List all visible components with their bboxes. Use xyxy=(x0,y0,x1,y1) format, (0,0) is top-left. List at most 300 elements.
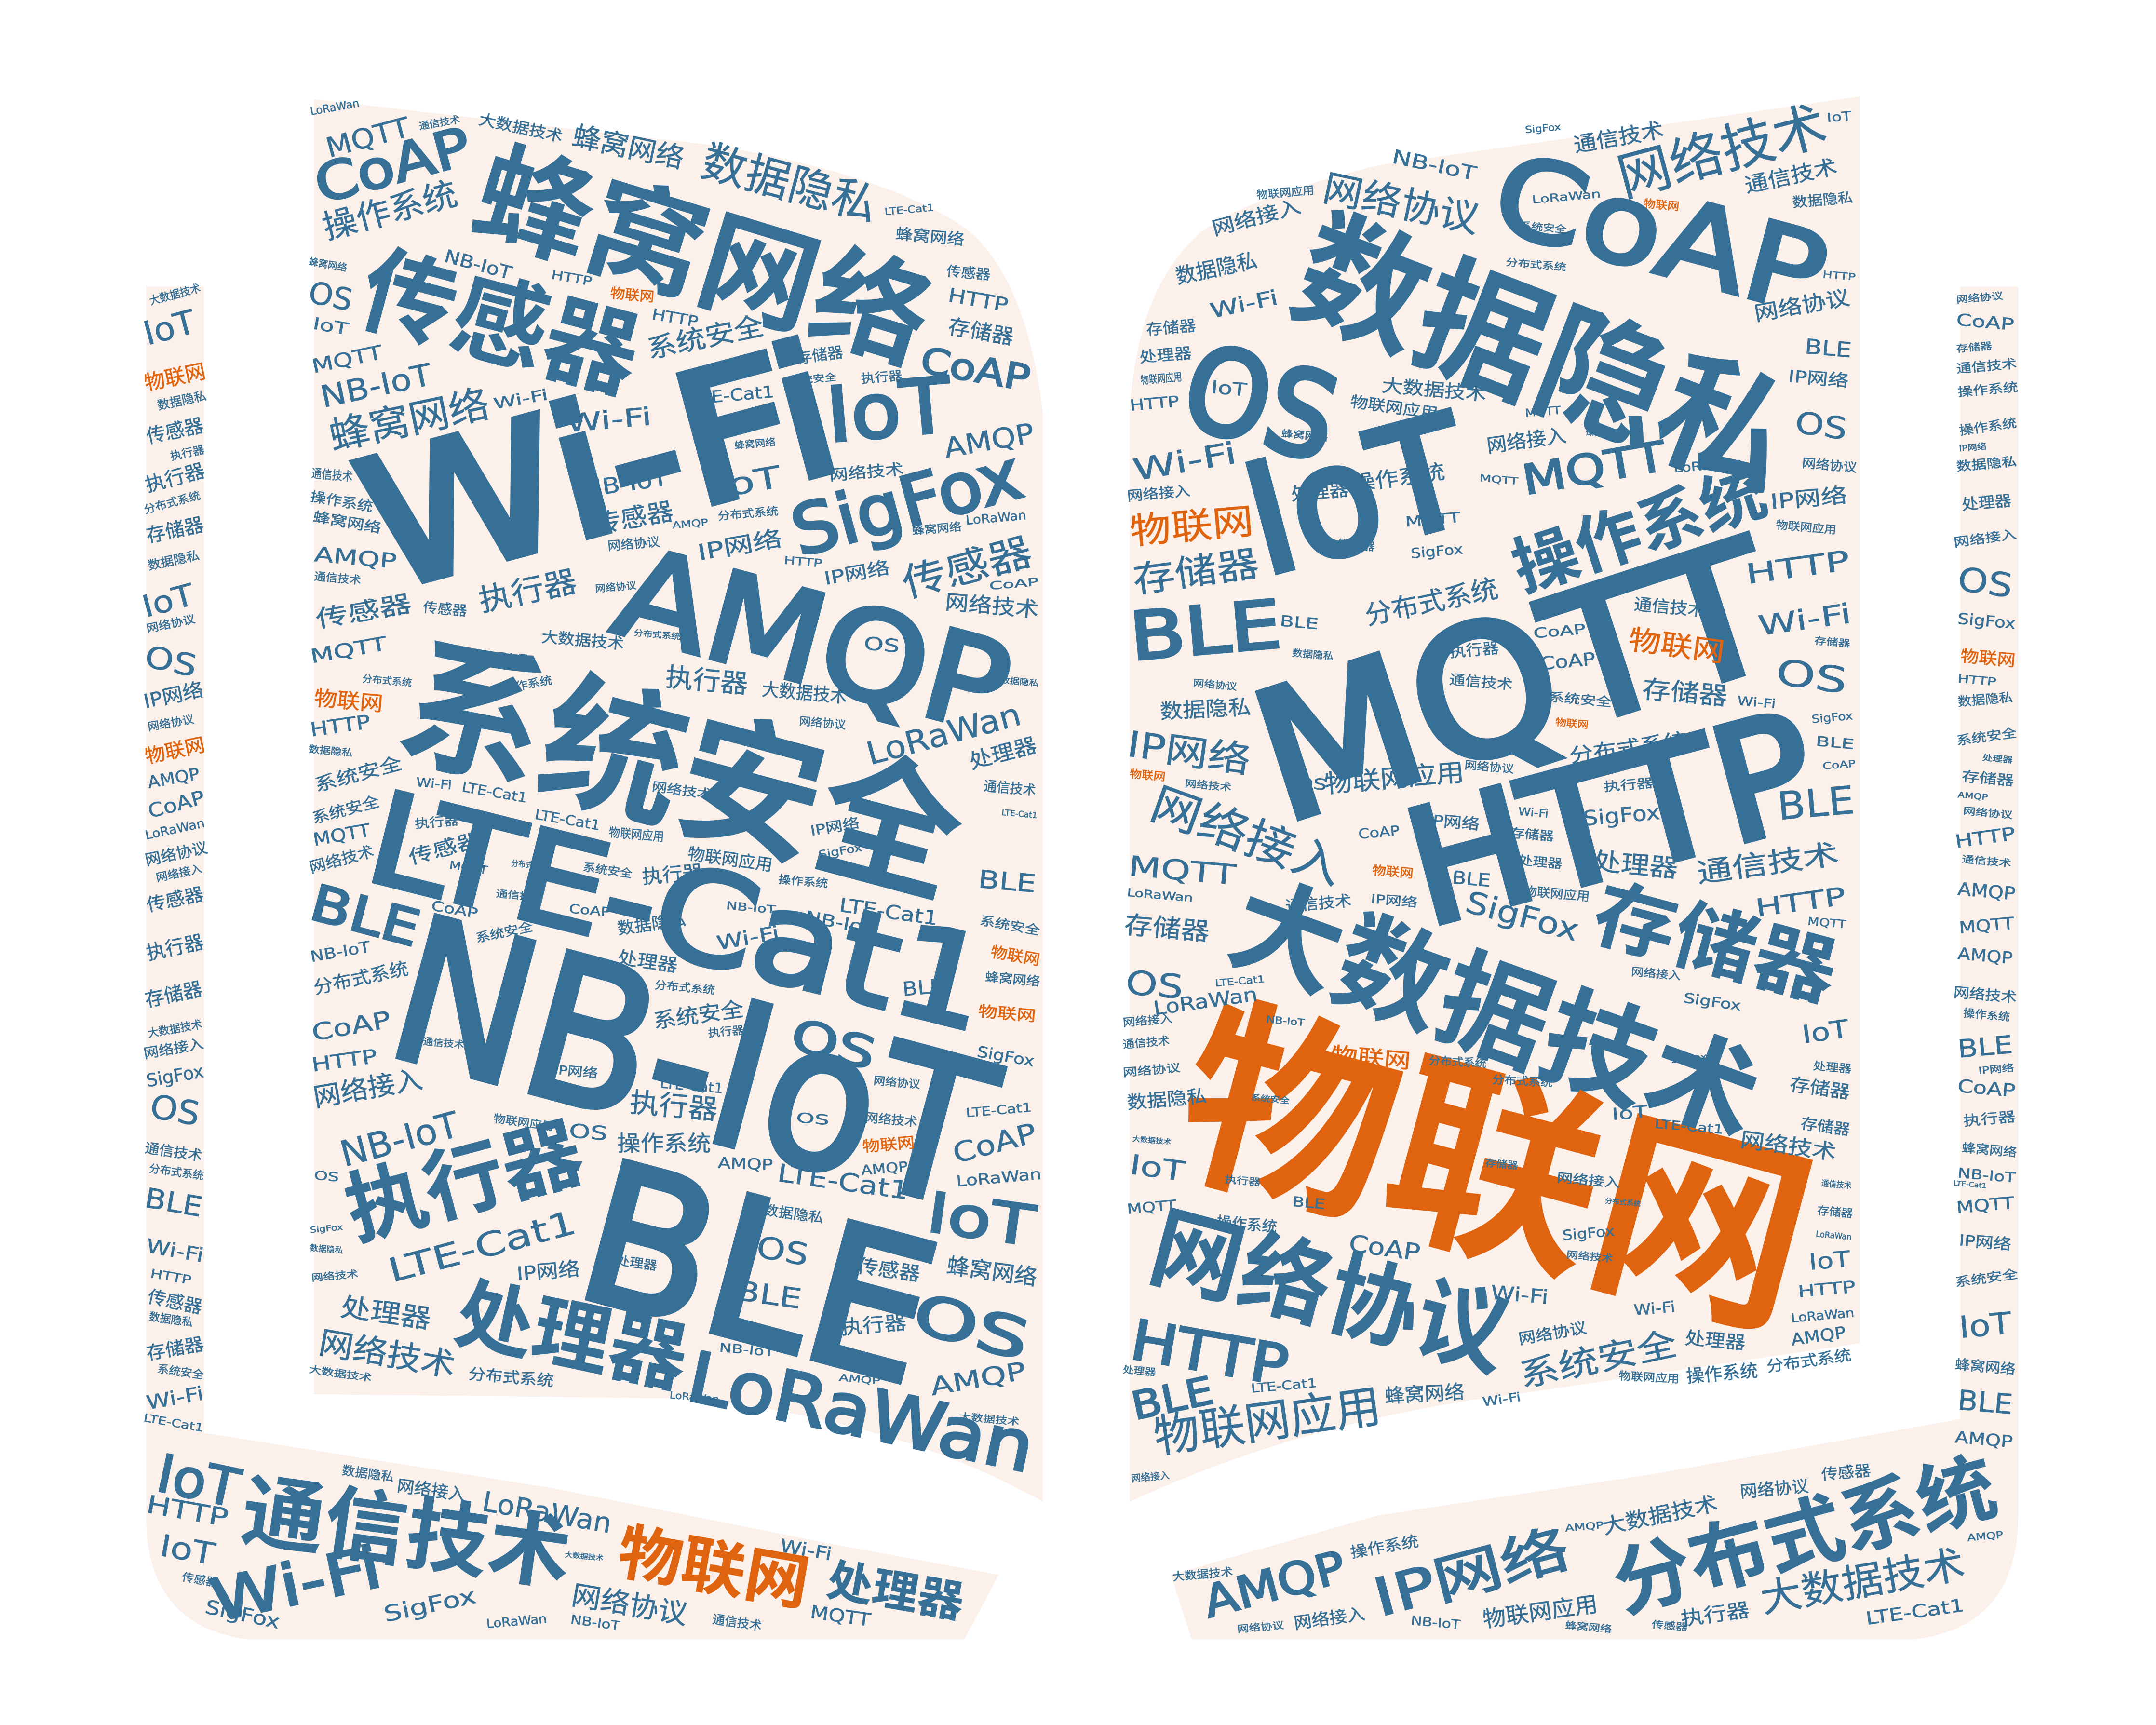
panel: right page small words: 执行器 xyxy=(1224,1173,1261,1188)
panel: right page small words: IoT xyxy=(1800,1014,1851,1050)
panel: left page small words: 操作系统 xyxy=(502,674,553,695)
panel: left page small words: LTE-Cat1 xyxy=(660,1075,724,1097)
panel: left strip words: IoT xyxy=(138,577,198,624)
panel: left page small words: AMQP xyxy=(717,1155,773,1174)
panel: left page small words: 系统安全 xyxy=(310,793,381,827)
panel: right page small words: 网络技术 xyxy=(1185,778,1232,793)
panel: right page small words: 分布式系统 xyxy=(1604,1197,1641,1208)
panel: right page small words: 存储器 xyxy=(1484,1157,1519,1172)
panel: left page small words: 大数据技术 xyxy=(477,111,565,146)
panel: right page large words: 操作系统 xyxy=(1504,455,1775,606)
panel: right strip words: 通信技术 xyxy=(1961,853,2012,869)
panel: right strip words xyxy=(1953,290,2019,1452)
panel: left strip words: 传感器 xyxy=(145,884,205,916)
panel: left page small words: 网络技术 xyxy=(864,1111,918,1130)
panel: left page large words: BLE xyxy=(559,1121,957,1428)
panel: right page small words: 物联网应用 xyxy=(1140,371,1183,387)
panel: right page small words: 系统安全 xyxy=(1516,1324,1680,1395)
panel: left page small words: 系统安全 xyxy=(789,371,836,387)
panel: left page small words: LTE-Cat1 xyxy=(884,202,934,217)
panel: right page small words: Wi-Fi xyxy=(1737,694,1776,712)
panel: left page small words: CoAP xyxy=(568,902,611,920)
panel: right page small words: IP网络 xyxy=(1427,811,1480,834)
panel: bottom right band words: 大数据技术 xyxy=(1172,1566,1233,1584)
panel: left page small words: NB-IoT xyxy=(581,465,670,502)
panel: left page small words: MQTT xyxy=(323,111,414,164)
panel: right page small words: Wi-Fi xyxy=(1490,1281,1550,1308)
panel: left page small words: Wi-Fi xyxy=(416,775,452,793)
panel: right page small words: 网络接入 xyxy=(1144,777,1350,895)
panel: left page small words: 网络接入 xyxy=(311,1064,425,1113)
panel: left strip words: 网络接入 xyxy=(155,862,203,885)
panel: right page small words: 蜂窝网络 xyxy=(1384,1381,1465,1407)
panel: left page small words: OS xyxy=(754,1229,811,1273)
panel: right page small words: 物联网 xyxy=(1555,716,1589,730)
panel: left page small words: MQTT xyxy=(309,633,389,668)
panel: right strip words: IP网络 xyxy=(1959,442,1987,454)
panel: left page small words: Wi-Fi xyxy=(492,386,550,413)
panel: right page small words: OS xyxy=(1295,774,1327,794)
panel: left page small words: BLE xyxy=(902,975,944,1001)
panel: left page small words: 蜂窝网络 xyxy=(984,970,1041,989)
panel: right page small words: 通信技术 xyxy=(1122,1035,1170,1051)
panel: left page small words: 蜂窝网络 xyxy=(570,120,687,175)
panel: left page large words: 蜂窝网络 xyxy=(459,126,946,389)
panel: right strip words: 网络协议 xyxy=(1963,805,2013,821)
panel: right page small words: 物联网应用 xyxy=(1323,758,1466,799)
panel: left page small words: 大数据技术 xyxy=(761,679,848,707)
panel: left page small words: 网络技术 xyxy=(944,590,1039,622)
panel: right page small words: 分布式系统 xyxy=(1362,573,1500,631)
panel: left strip words: 网络协议 xyxy=(144,839,209,869)
panel: left page small words: HTTP xyxy=(946,284,1010,317)
panel: bottom right band words: 网络协议 xyxy=(1739,1477,1809,1502)
panel: right strip words: BLE xyxy=(1956,1384,2014,1421)
panel: left page small words: 物联网 xyxy=(989,943,1041,969)
panel: right page small words: HTTP xyxy=(1744,545,1852,591)
panel: right page small words: 操作系统 xyxy=(1350,459,1446,497)
panel: left page small words: IoT xyxy=(713,459,784,505)
panel: right page small words: 处理器 xyxy=(1122,1363,1156,1378)
panel: bottom right band words: NB-IoT xyxy=(1410,1614,1461,1632)
panel: right page large words: HTTP xyxy=(1388,677,1835,962)
panel: right page small words: 分布式系统 xyxy=(1505,256,1567,273)
panel: right page small words: 处理器 xyxy=(1518,853,1563,872)
panel: right strip words: SigFox xyxy=(1957,610,2016,633)
panel: right page small words: CoAP xyxy=(1358,822,1401,842)
panel: left page small words: 网络技术 xyxy=(308,843,376,876)
panel: left page small words: 网络协议 xyxy=(595,579,637,594)
panel: right page small words: 网络接入 xyxy=(1210,195,1303,240)
panel: left page small words: NB-IoT xyxy=(336,1104,464,1175)
panel: left page small words: LoRaWan xyxy=(956,1166,1042,1190)
panel: right strip words: 操作系统 xyxy=(1958,416,2018,438)
panel: right page small words: SigFox xyxy=(1462,884,1583,948)
panel: left strip words: 存储器 xyxy=(145,1334,205,1364)
panel: left page small words: 执行器 xyxy=(664,662,749,700)
panel: left page small words: 通信技术 xyxy=(422,1036,465,1051)
panel: left strip words: 数据隐私 xyxy=(148,1310,193,1329)
panel: left page small words: HTTP xyxy=(310,1045,378,1077)
panel: bottom left band words: IoT xyxy=(151,1442,245,1520)
panel: left page large words: NB-IoT xyxy=(369,873,1017,1255)
panel: right page small words: 执行器 xyxy=(1603,776,1654,795)
panel: right page small words: 分布式系统 xyxy=(1492,1074,1553,1090)
panel: right page small words: 数据隐私 xyxy=(1159,695,1252,724)
panel: left strip words: 大数据技术 xyxy=(148,282,202,308)
panel: left page small words: NB-IoT xyxy=(726,900,777,916)
panel: right page small words: 分布式系统 xyxy=(1765,1347,1852,1376)
panel: bottom right band words: LTE-Cat1 xyxy=(1864,1595,1966,1629)
panel: right strip words: BLE xyxy=(1956,1030,2014,1064)
panel: left page small words: 网络技术 xyxy=(316,1324,458,1384)
panel: left page small words: 数据隐私 xyxy=(616,910,687,939)
panel: right page small words: 物联网 xyxy=(1643,198,1680,213)
panel: left page small words: OS xyxy=(906,1280,1036,1373)
panel: right page small words: IP网络 xyxy=(1788,367,1849,391)
panel: left page small words: LoRaWan xyxy=(862,696,1025,772)
panel: right page small words: MQTT xyxy=(1524,404,1562,420)
panel: left page small words: IP网络 xyxy=(822,557,891,589)
panel: right page small words: 物联网应用 xyxy=(1775,519,1837,537)
panel: right page small words: 存储器 xyxy=(1123,911,1211,947)
panel: right page large words: 存储器 xyxy=(1584,869,1846,1019)
panel: right page small words: MQTT xyxy=(1519,432,1670,505)
panel: bottom right band words: 分布式系统 xyxy=(1604,1443,2006,1630)
panel: right page small words: LTE-Cat1 xyxy=(1214,973,1265,989)
panel: left page small words: OS xyxy=(305,274,356,318)
panel: right strip words: IP网络 xyxy=(1958,1232,2012,1253)
panel: left page small words: 蜂窝网络 xyxy=(308,256,348,274)
panel: left page small words: 物联网应用 xyxy=(493,1112,554,1133)
panel: right page small words: 网络接入 xyxy=(1630,966,1681,983)
panel: right strip words: AMQP xyxy=(1957,878,2016,904)
panel: left page small words: 系统安全 xyxy=(979,914,1041,938)
panel: right page small words: BLE xyxy=(1775,778,1856,829)
panel: right page small words: 网络协议 xyxy=(1752,286,1851,326)
panel: left page small words: MQTT xyxy=(310,341,385,378)
panel: left page small words: 大数据技术 xyxy=(541,629,625,653)
panel: right page small words: SigFox xyxy=(1671,1051,1708,1065)
panel: left page small words: 蜂窝网络 xyxy=(312,508,382,536)
panel: right strip words: IP网络 xyxy=(1978,1062,2015,1077)
panel: left page small words: 物联网 xyxy=(862,1134,916,1156)
panel: right strip words: 操作系统 xyxy=(1957,380,2019,400)
panel: right page small words: 存储器 xyxy=(1817,1205,1853,1220)
panel: right page small words: HTTP xyxy=(1822,269,1856,283)
panel: right page small words: 物联网 xyxy=(1372,863,1414,881)
panel: left page small words: NB-IoT xyxy=(719,1341,775,1360)
panel: right strip words: AMQP xyxy=(1957,944,2013,968)
panel: left page small words: 网络技术 xyxy=(311,1268,359,1283)
panel: left page large words xyxy=(308,115,1041,1488)
panel: left page small words: 处理器 xyxy=(338,1292,433,1334)
panel: right page small words: LoRaWan xyxy=(1791,1306,1855,1326)
panel: bottom left band words: SigFox xyxy=(203,1596,282,1633)
panel: right page small words: BLE xyxy=(1292,1193,1326,1213)
panel: right page small words: 网络接入 xyxy=(1556,1171,1620,1191)
panel: left page small words: 网络协议 xyxy=(873,1075,921,1091)
panel: left strip words: 大数据技术 xyxy=(147,1018,203,1040)
panel: right page small words: Wi-Fi xyxy=(1633,1298,1676,1319)
panel: right page small words: SigFox xyxy=(1562,1223,1615,1243)
panel: right page small words: 系统安全 xyxy=(1548,690,1613,710)
panel: right page large words: OS xyxy=(1170,319,1351,489)
panel: left page small words: 存储器 xyxy=(795,344,844,367)
panel: left page small words: CoAP xyxy=(989,576,1039,593)
panel: right strip words: AMQP xyxy=(1954,1428,2013,1452)
panel: right page small words: IoT xyxy=(1128,1149,1187,1188)
panel: right page small words: 物联网应用 xyxy=(1150,1380,1384,1464)
panel: right page small words: 分布式系统 xyxy=(1428,1054,1487,1070)
panel: bottom left band words: 网络接入 xyxy=(396,1476,467,1505)
panel: right page small words: 处理器 xyxy=(1812,1060,1852,1076)
panel: left strip words: 分布式系统 xyxy=(143,489,202,516)
panel: right page small words: 物联网 xyxy=(1128,500,1255,553)
panel: left page small words: 网络技术 xyxy=(651,780,713,802)
panel: left strip words: HTTP xyxy=(149,1267,192,1288)
panel: left page small words: LTE-Cat1 xyxy=(776,1159,911,1206)
panel: right page small words: 网络接入 xyxy=(1485,424,1567,458)
panel: left page small words: BLE xyxy=(977,865,1037,899)
panel: right page large words: IoT xyxy=(1227,382,1488,610)
panel: right page small words: 网络协议 xyxy=(1319,166,1483,242)
panel: right page small words: 网络接入 xyxy=(1131,1469,1170,1484)
panel: bottom right band words: 执行器 xyxy=(1680,1599,1751,1631)
panel: left strip words: IoT xyxy=(139,302,200,353)
panel: left page small words: OS xyxy=(795,1109,830,1128)
panel: right page small words: CoAP xyxy=(1822,757,1856,772)
panel: left page small words: HTTP xyxy=(550,268,593,289)
panel: left page small words: CoAP xyxy=(917,339,1033,400)
panel: left strip words: OS xyxy=(142,639,200,684)
panel: left page small words: LTE-Cat1 xyxy=(534,806,602,834)
panel: left page small words: MQTT xyxy=(311,820,372,850)
panel: left page large words: AMQP xyxy=(601,519,1024,762)
panel: bottom left band words: 网络协议 xyxy=(569,1579,690,1631)
panel: left page small words: OS xyxy=(785,1009,881,1080)
panel: left strip words: 存储器 xyxy=(144,513,205,547)
panel: left strip words: SigFox xyxy=(145,1061,205,1092)
panel: left page small words: 通信技术 xyxy=(311,466,353,485)
panel: right page large words: 大数据技术 xyxy=(1214,858,1776,1167)
panel: right page small words: 传感器 xyxy=(1336,538,1375,553)
panel: left page large words: LTE-Cat1 xyxy=(354,764,1004,1060)
panel: left page large words: LoRaWan xyxy=(681,1336,1041,1488)
panel: right page large words: MQTT xyxy=(1231,500,1802,863)
panel: right page small words: OS xyxy=(1773,651,1850,702)
panel: right page small words: 通信技术 xyxy=(1743,155,1839,198)
panel: bottom right band words xyxy=(1172,1443,2006,1635)
panel: right page small words: 数据隐私 xyxy=(1126,1086,1208,1113)
panel: right page large words: 物联网 xyxy=(1154,972,1835,1370)
panel: left page small words: 分布式系统 xyxy=(511,859,547,872)
panel: right page small words: 网络接入 xyxy=(1126,483,1191,504)
panel: left page large words: 执行器 xyxy=(336,1107,593,1257)
panel: right page small words: 存储器 xyxy=(1800,1115,1851,1139)
panel: right page small words: 操作系统 xyxy=(1585,426,1619,440)
panel: left page small words: 操作系统 xyxy=(617,1131,711,1156)
panel: left page small words: 数据隐私 xyxy=(696,135,883,231)
panel: left strip words: 物联网 xyxy=(143,734,207,768)
panel: left page small words: CoAP xyxy=(430,897,479,921)
panel: left page small words: 蜂窝网络 xyxy=(895,226,965,249)
panel: left page small words: OS xyxy=(313,1168,339,1185)
panel: left page small words: 执行器 xyxy=(839,1311,907,1339)
panel: right page small words: LoRaWan xyxy=(1532,188,1601,206)
panel: bottom left band words: IoT xyxy=(157,1528,218,1572)
panel: left strip words: 执行器 xyxy=(144,931,205,965)
panel: bottom left band words: 数据隐私 xyxy=(341,1463,395,1485)
panel: right page small words: Wi-Fi xyxy=(1482,1390,1522,1410)
panel: right page small words: 蜂窝网络 xyxy=(1281,428,1328,443)
panel: left page small words: MQTT xyxy=(448,859,489,877)
panel: left page small words: 操作系统 xyxy=(778,874,828,890)
panel: right strip words: 通信技术 xyxy=(1956,357,2017,377)
panel: left page small words: 数据隐私 xyxy=(1000,675,1039,688)
panel: left page small words: HTTP xyxy=(783,554,823,570)
panel: right strip words: 蜂窝网络 xyxy=(1954,1356,2016,1377)
panel: left page small words: 系统安全 xyxy=(474,920,534,946)
panel: right page small words: 系统安全 xyxy=(1519,220,1567,235)
panel: left strip words: 网络协议 xyxy=(145,613,196,635)
panel: left page small words: 物联网 xyxy=(610,285,655,305)
panel: right page small words: Wi-Fi xyxy=(1518,805,1549,821)
panel: left strip words: LTE-Cat1 xyxy=(143,1412,204,1435)
panel: left strip words: 传感器 xyxy=(144,415,205,448)
panel: left page small words: 大数据技术 xyxy=(958,1411,1020,1428)
panel: right strip words: NB-IoT xyxy=(1957,1164,2016,1186)
panel: right strip words: 系统安全 xyxy=(1955,726,2018,749)
panel: left strip words: CoAP xyxy=(146,786,207,823)
panel: left page small words: 系统安全 xyxy=(644,310,767,365)
panel: bottom right band words: 传感器 xyxy=(1820,1462,1872,1483)
panel: right page small words: 物联网应用 xyxy=(1349,393,1439,423)
panel: right page small words: 通信技术 xyxy=(1449,671,1513,693)
panel: bottom left band words: 通信技术 xyxy=(236,1464,577,1603)
panel: left strip words: 物联网 xyxy=(142,359,208,396)
panel: right strip words: 处理器 xyxy=(1961,492,2012,514)
panel: left page small words: AMQP xyxy=(861,1158,908,1179)
panel: left strip words: LoRaWan xyxy=(144,816,206,843)
panel: right page small words: 通信技术 xyxy=(1694,838,1841,889)
panel: right page small words: 物联网 xyxy=(1129,768,1166,783)
panel: bottom left band words: 物联网 xyxy=(612,1516,815,1619)
panel: left page small words: NB-IoT xyxy=(442,246,514,283)
panel: right strip words: 数据隐私 xyxy=(1957,690,2013,710)
panel: right page small words: MQTT xyxy=(1127,850,1238,891)
panel: left page large words: 系统安全 xyxy=(384,616,980,927)
panel: left page small words: 分布式系统 xyxy=(717,505,779,523)
panel: left page small words: LTE-Cat1 xyxy=(384,1203,580,1291)
panel: right page small words: IP网络 xyxy=(1370,892,1418,910)
panel: left page small words: 蜂窝网络 xyxy=(325,381,493,459)
panel: right page small words: SigFox xyxy=(1683,989,1742,1014)
panel: right page small words: 网络协议 xyxy=(1464,759,1514,776)
panel: left page small words: IoT xyxy=(923,1180,1039,1259)
panel: right page small words: 网络技术 xyxy=(1566,1249,1614,1264)
panel: right page small words: 大数据技术 xyxy=(1381,375,1487,405)
panel: right page small words: 分布式系统 xyxy=(1568,729,1688,768)
panel: left page small words: NB-IoT xyxy=(803,907,878,939)
panel: right page small words: IoT xyxy=(1611,1102,1649,1124)
panel: right page small words: 处理器 xyxy=(1591,847,1679,883)
panel: left page small words: 系统安全 xyxy=(652,997,745,1034)
panel: left page small words: LoRaWan xyxy=(669,1389,719,1405)
panel: right page small words: BLE xyxy=(1815,733,1855,753)
panel: right page small words: 通信技术 xyxy=(1633,595,1706,620)
panel: bottom right band words: IP网络 xyxy=(1367,1518,1576,1629)
panel: left strip words: 系统安全 xyxy=(156,1363,204,1382)
panel: left strip words: 分布式系统 xyxy=(148,1162,204,1183)
panel: left page large words: IoT xyxy=(823,361,955,460)
panel: left page large words: 传感器 xyxy=(349,233,651,415)
panel: left strip words: Wi-Fi xyxy=(145,1382,205,1415)
panel: right page small words: BLE xyxy=(1127,586,1284,676)
panel: left page small words: 传感器 xyxy=(422,599,468,619)
panel: right page small words: BLE xyxy=(1804,335,1852,363)
panel: right strip words: 数据隐私 xyxy=(1956,455,2017,474)
panel: right page small words: 大数据技术 xyxy=(1132,1135,1172,1146)
panel: bottom right band words: 大数据技术 xyxy=(1757,1542,1968,1622)
panel: right page small words: HTTP xyxy=(1797,1278,1857,1302)
panel: right page large words xyxy=(1139,94,1846,1390)
panel: right page small words: NB-IoT xyxy=(1266,1013,1306,1028)
panel: bottom left band words: MQTT xyxy=(809,1602,872,1631)
panel: right page small words: Wi-Fi xyxy=(1130,435,1240,488)
panel: left page small words: IP网络 xyxy=(696,526,784,566)
panel: left page small words: 通信技术 xyxy=(496,888,543,903)
panel: right page small words: 网络技术 xyxy=(1739,1128,1838,1165)
panel: right page small words: CoAP xyxy=(1347,1230,1422,1267)
book shape background xyxy=(146,96,2018,1640)
panel: left strip words: 数据隐私 xyxy=(156,389,208,413)
panel: right page small words: IoT xyxy=(1826,109,1852,125)
panel: right page small words: AMQP xyxy=(1790,1323,1847,1350)
panel: right page small words: 存储器 xyxy=(1814,635,1851,649)
panel: right strip words: 操作系统 xyxy=(1963,1007,2010,1024)
panel: right page small words: CoAP xyxy=(1539,648,1596,674)
panel: left page small words: HTTP xyxy=(309,711,372,741)
panel: right page small words: LoRaWan xyxy=(1815,1229,1852,1242)
panel: left page small words: SigFox xyxy=(310,1223,343,1235)
panel: left page small words: 蜂窝网络 xyxy=(912,521,962,538)
panel: left page small words: 分布式系统 xyxy=(654,979,715,997)
panel: left strip words: 网络协议 xyxy=(147,713,195,734)
panel: right page small words: Wi-Fi xyxy=(1756,598,1853,642)
panel: right page small words: SigFox xyxy=(1811,710,1853,726)
panel: right page small words: LTE-Cat1 xyxy=(1251,1376,1318,1396)
panel: bottom right band words: AMQP xyxy=(1967,1529,2004,1544)
panel: right strip words: MQTT xyxy=(1955,1193,2015,1218)
panel: left strip words: 通信技术 xyxy=(144,1140,203,1164)
panel: right page small words: MQTT xyxy=(1404,509,1461,530)
panel: bottom left band words: HTTP xyxy=(144,1490,230,1533)
panel: left page small words: 分布式系统 xyxy=(362,673,412,688)
panel: right page small words: 存储器 xyxy=(1509,826,1554,844)
panel: left page large words: CoAP xyxy=(308,115,477,216)
panel: left page small words: 传感器 xyxy=(897,529,1037,606)
panel: left page small words: 传感器 xyxy=(946,263,991,283)
panel: right page small words: 处理器 xyxy=(1139,345,1192,366)
panel: right page small words: 存储器 xyxy=(1789,1074,1851,1103)
panel: left page small words: AMQP xyxy=(313,542,398,574)
panel: right strip words: 存储器 xyxy=(1956,340,1993,354)
panel: left page small words: HTTP xyxy=(650,306,700,331)
panel: right page small words: MQTT xyxy=(1807,915,1847,931)
panel: left page small words: CoAP xyxy=(949,1117,1040,1170)
panel: left page small words: 系统安全 xyxy=(312,753,404,796)
